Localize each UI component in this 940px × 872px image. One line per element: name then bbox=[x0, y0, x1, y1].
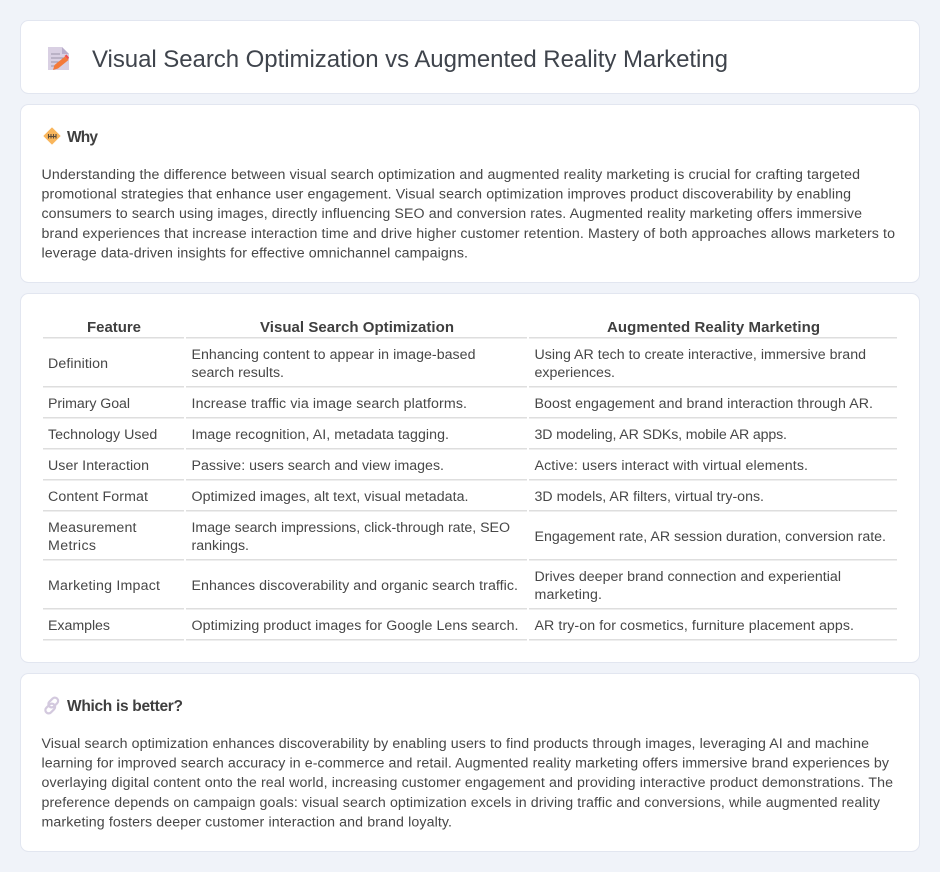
row: marketing impact: Marketing Impact bbox=[48, 578, 160, 594]
heading: which is better: Which is better? bbox=[67, 698, 183, 715]
row: primary goal bbox=[48, 396, 873, 412]
row: definition: experiences. bbox=[534, 365, 615, 381]
text block: why paragraph: promotional strategies that enhance user engagement. Visual search optimization improves product discoverability by enabling bbox=[42, 187, 851, 203]
table header row: Visual Search Optimization bbox=[260, 319, 454, 336]
row: content format: Content Format bbox=[48, 489, 148, 505]
row: definition bbox=[48, 347, 866, 381]
row: measurement metrics bbox=[48, 520, 886, 554]
text block: why paragraph: Understanding the difference between visual search optimization and augmented reality marketing is crucial for crafting targeted bbox=[42, 167, 860, 183]
table header row bbox=[87, 319, 820, 336]
row: marketing impact bbox=[48, 569, 841, 603]
text block: which is better paragraph: overlaying digital content onto the real world, increasing customer engagement and providing interactive product demonstrations. The bbox=[42, 775, 893, 791]
text block: why paragraph bbox=[42, 167, 895, 261]
row: technology used: 3D modeling, AR SDKs, mobile AR apps. bbox=[534, 427, 787, 443]
row: measurement metrics: rankings. bbox=[192, 538, 249, 554]
row: marketing impact: Enhances discoverability and organic search traffic. bbox=[192, 578, 518, 594]
row: primary goal: Boost engagement and brand interaction through AR. bbox=[534, 396, 873, 412]
row: definition: Using AR tech to create interactive, immersive brand bbox=[534, 347, 866, 363]
row: user interaction: Active: users interact with virtual elements. bbox=[534, 458, 808, 474]
heading: why: Why bbox=[67, 129, 98, 146]
row: content format bbox=[48, 489, 764, 505]
text block: which is better paragraph bbox=[42, 736, 893, 830]
row: examples: Optimizing product images for Google Lens search. bbox=[192, 618, 518, 634]
row: definition: search results. bbox=[192, 365, 284, 381]
row: technology used bbox=[48, 427, 787, 443]
row: measurement metrics: Image search impressions, click-through rate, SEO bbox=[192, 520, 510, 536]
row: technology used: Technology Used bbox=[48, 427, 157, 443]
row: definition: Enhancing content to appear in image-based bbox=[192, 347, 476, 363]
panel: comparison table bbox=[20, 294, 920, 662]
row: examples bbox=[48, 618, 854, 634]
row: measurement metrics: Engagement rate, AR session duration, conversion rate. bbox=[534, 529, 886, 545]
panel: title header bbox=[20, 20, 920, 94]
text block: why paragraph: leverage data-driven insights for effective omnichannel campaigns. bbox=[42, 245, 468, 261]
table header row: Feature bbox=[87, 319, 141, 336]
text block: which is better paragraph: Visual search optimization enhances discoverability by enabling users to find products through images, leveraging AI and machine bbox=[42, 736, 869, 752]
icon: warning diamond bbox=[44, 128, 60, 144]
text block: why paragraph: brand experiences that increase interaction time and drive higher customer retention. Mastery of both approaches allows marketers to bbox=[42, 226, 895, 242]
row: user interaction bbox=[48, 458, 808, 474]
row: marketing impact: marketing. bbox=[534, 587, 602, 603]
icon: chain link bbox=[44, 696, 59, 715]
text block: which is better paragraph: preference depends on campaign goals: visual search optimization excels in driving traffic and conversions, while augmented reality bbox=[42, 795, 881, 811]
row: measurement metrics: Measurement bbox=[48, 520, 137, 536]
text block: why paragraph: consumers to search using images, directly influencing SEO and conversion rates. Augmented reality marketing offers immersive bbox=[42, 206, 862, 222]
row: examples: AR try-on for cosmetics, furniture placement apps. bbox=[534, 618, 854, 634]
row: content format: 3D models, AR filters, virtual try-ons. bbox=[534, 489, 764, 505]
title: Visual Search Optimization vs Augmented Reality Marketing bbox=[92, 46, 728, 73]
row: technology used: Image recognition, AI, metadata tagging. bbox=[192, 427, 449, 443]
row: content format: Optimized images, alt text, visual metadata. bbox=[192, 489, 468, 505]
row: primary goal: Increase traffic via image search platforms. bbox=[192, 396, 467, 412]
row: primary goal: Primary Goal bbox=[48, 396, 130, 412]
icon: memo with pencil bbox=[48, 47, 69, 70]
panel: why bbox=[20, 104, 920, 282]
row: marketing impact: Drives deeper brand connection and experiential bbox=[534, 569, 841, 585]
row: user interaction: User Interaction bbox=[48, 458, 149, 474]
table header row: Augmented Reality Marketing bbox=[607, 319, 820, 336]
text block: which is better paragraph: marketing fosters deeper customer interaction and brand loyalty. bbox=[42, 814, 452, 830]
row: measurement metrics: Metrics bbox=[48, 538, 96, 554]
text block: which is better paragraph: learning for improved search accuracy in e-commerce and retail. Augmented reality marketing offers immersive brand experiences by bbox=[42, 756, 890, 772]
row: examples: Examples bbox=[48, 618, 110, 634]
row: definition: Definition bbox=[48, 356, 108, 372]
row: user interaction: Passive: users search and view images. bbox=[192, 458, 444, 474]
panel: which is better bbox=[20, 674, 920, 852]
